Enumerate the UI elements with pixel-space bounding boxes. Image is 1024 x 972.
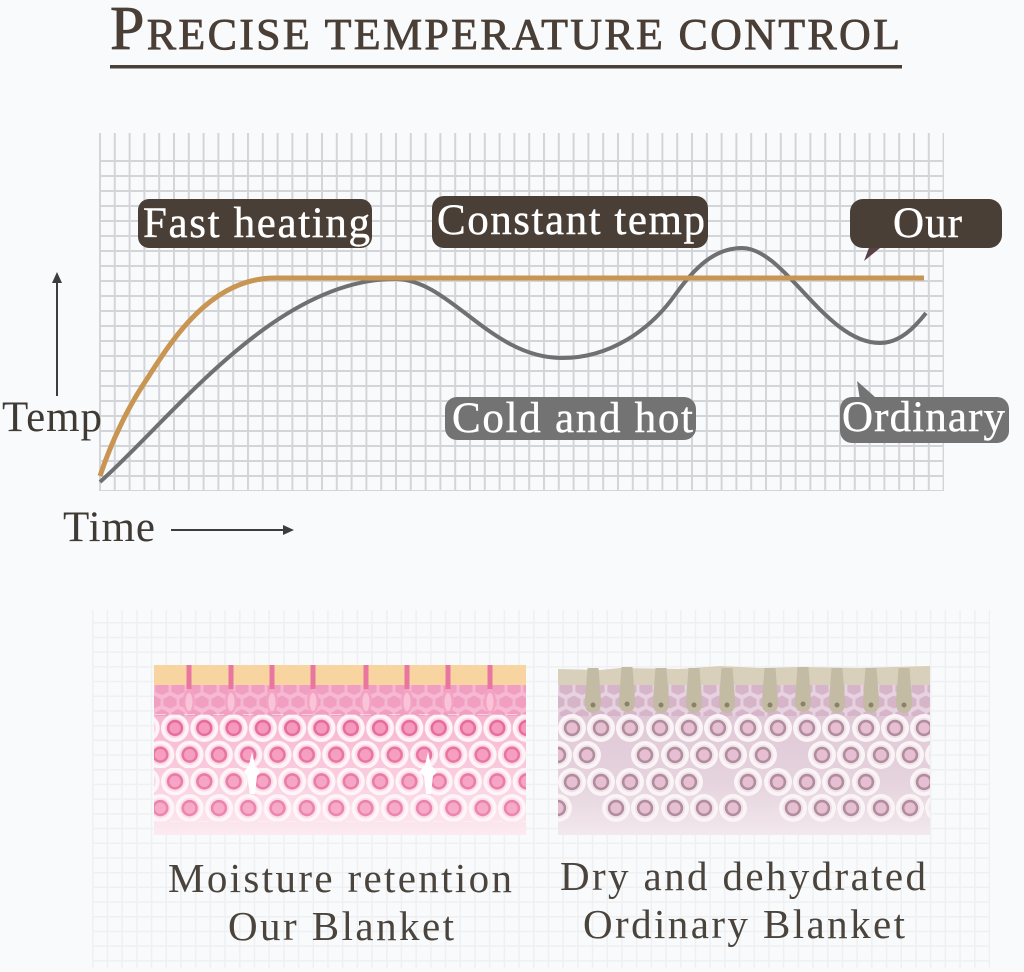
label: our (850, 199, 1002, 261)
cells row 3 (558, 768, 938, 796)
cells row 1 (558, 714, 938, 742)
label: our: Our (893, 200, 962, 247)
label: ordinary: Ordinary (842, 394, 1006, 441)
y axis arrow (52, 272, 62, 396)
caption: ordinary blanket (560, 853, 926, 947)
caption: ordinary blanket: Dry and dehydrated (560, 853, 926, 899)
curve: our blanket (100, 278, 924, 476)
caption: ordinary blanket: Ordinary Blanket (583, 901, 906, 947)
caption: our blanket: Moisture retention (168, 855, 512, 901)
illustration: dehydrated skin (544, 666, 953, 835)
label: constant temp: Constant temp (437, 197, 705, 244)
cells row 2 (544, 741, 953, 769)
chart: temperature over time (99, 133, 944, 491)
cells row 4 (544, 794, 953, 822)
caption: our blanket: Our Blanket (228, 903, 455, 949)
panel: skin comparison (92, 610, 990, 968)
caption: our blanket (168, 855, 512, 949)
icon: moisture arrow left (244, 752, 260, 794)
curve: ordinary blanket (100, 248, 926, 482)
illustration: moisturised skin (154, 665, 526, 835)
x axis label: Time (63, 504, 155, 551)
icon: moisture arrow right (419, 752, 437, 794)
y axis label: Temp (2, 394, 102, 441)
x axis arrow (171, 525, 294, 535)
label: cold and hot: Cold and hot (452, 395, 693, 442)
label: fast heating: Fast heating (143, 200, 370, 247)
